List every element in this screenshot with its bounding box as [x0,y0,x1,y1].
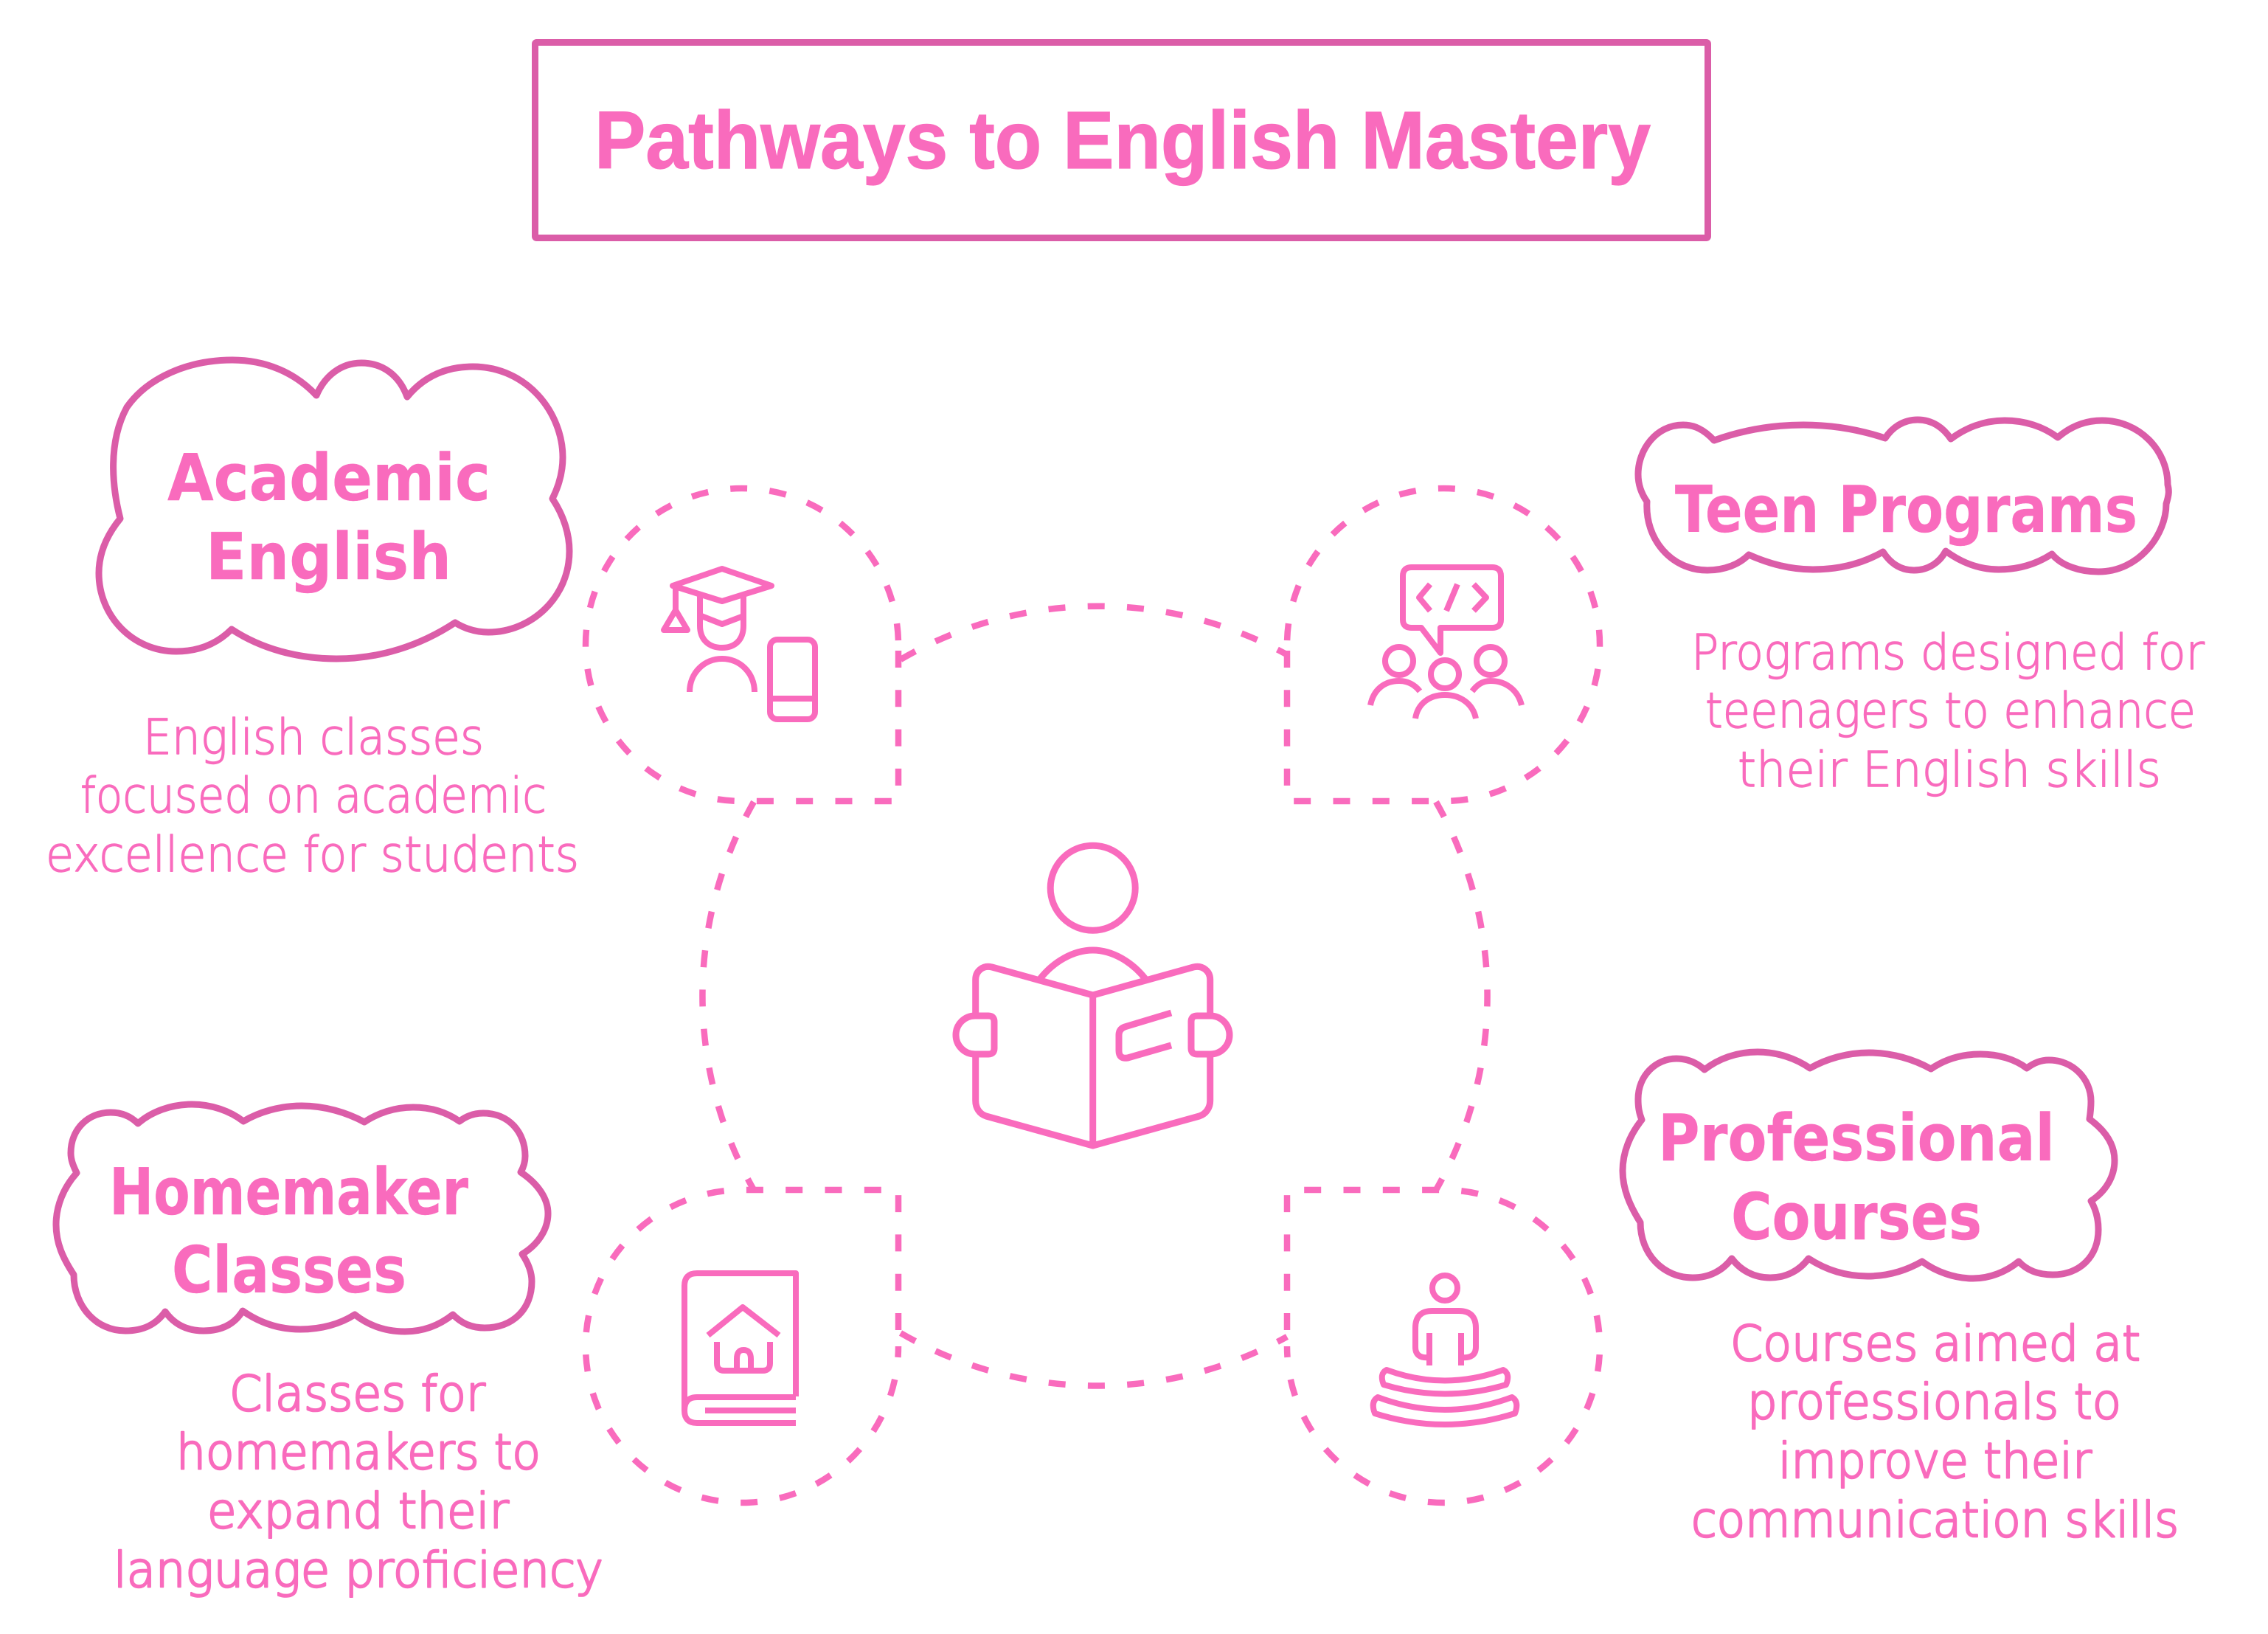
title: Pathways to English Mastery [594,95,1651,186]
heading: teen programs: Teen Programs [1675,472,2137,547]
connector ring [702,606,1488,1386]
description: homemaker classes [114,1365,603,1599]
panel: teen programs [1638,420,2205,798]
description: professional courses [1691,1315,2179,1548]
description: professional courses: improve their [1778,1433,2092,1489]
description: homemaker classes: homemakers to [176,1424,541,1481]
node: professional courses teardrop [1287,1190,1600,1503]
heading: academic english: English [206,519,451,595]
icon: meditating person [1373,1275,1516,1424]
description: teen programs: their English skills [1738,741,2161,798]
node: homemaker classes teardrop [586,1190,898,1503]
description: homemaker classes: language proficiency [114,1542,603,1599]
heading: professional courses [1658,1101,2055,1255]
panel: homemaker classes [56,1104,603,1599]
description: teen programs: Programs designed for [1691,624,2205,681]
node: academic english teardrop [586,488,898,801]
cloud: professional courses [1623,1052,2115,1278]
description: teen programs [1691,624,2205,798]
panel: professional courses [1623,1052,2179,1548]
icon: central reader with open book [956,845,1230,1146]
cloud: homemaker classes [56,1104,548,1332]
description: teen programs: teenagers to enhance [1705,682,2196,739]
heading: homemaker classes: Classes [172,1233,406,1308]
description: academic english: English classes [143,709,484,766]
icon: group with code speech bubble [1370,567,1522,719]
panel: academic english [46,360,579,883]
heading: homemaker classes [109,1154,468,1308]
description: academic english: excellence for students [46,826,579,883]
description: homemaker classes: Classes for [229,1365,486,1422]
description: professional courses: Courses aimed at [1730,1315,2140,1372]
title [535,43,1708,238]
heading: professional courses: Courses [1731,1180,1982,1255]
cloud: academic english [99,360,569,659]
heading: professional courses: Professional [1658,1101,2055,1176]
heading: academic english [167,440,490,595]
description: homemaker classes: expand their [207,1483,510,1540]
description: professional courses: professionals to [1747,1374,2121,1430]
description: academic english: focused on academic [80,767,547,824]
icon: student with graduation cap and phone [664,569,815,719]
heading: homemaker classes: Homemaker [109,1154,468,1230]
description: professional courses: communication skills [1691,1492,2179,1548]
heading: academic english: Academic [167,440,490,516]
description: academic english [46,709,579,883]
node: teen programs teardrop [1287,488,1600,801]
icon: book with house [684,1273,796,1423]
cloud: teen programs [1638,420,2168,572]
